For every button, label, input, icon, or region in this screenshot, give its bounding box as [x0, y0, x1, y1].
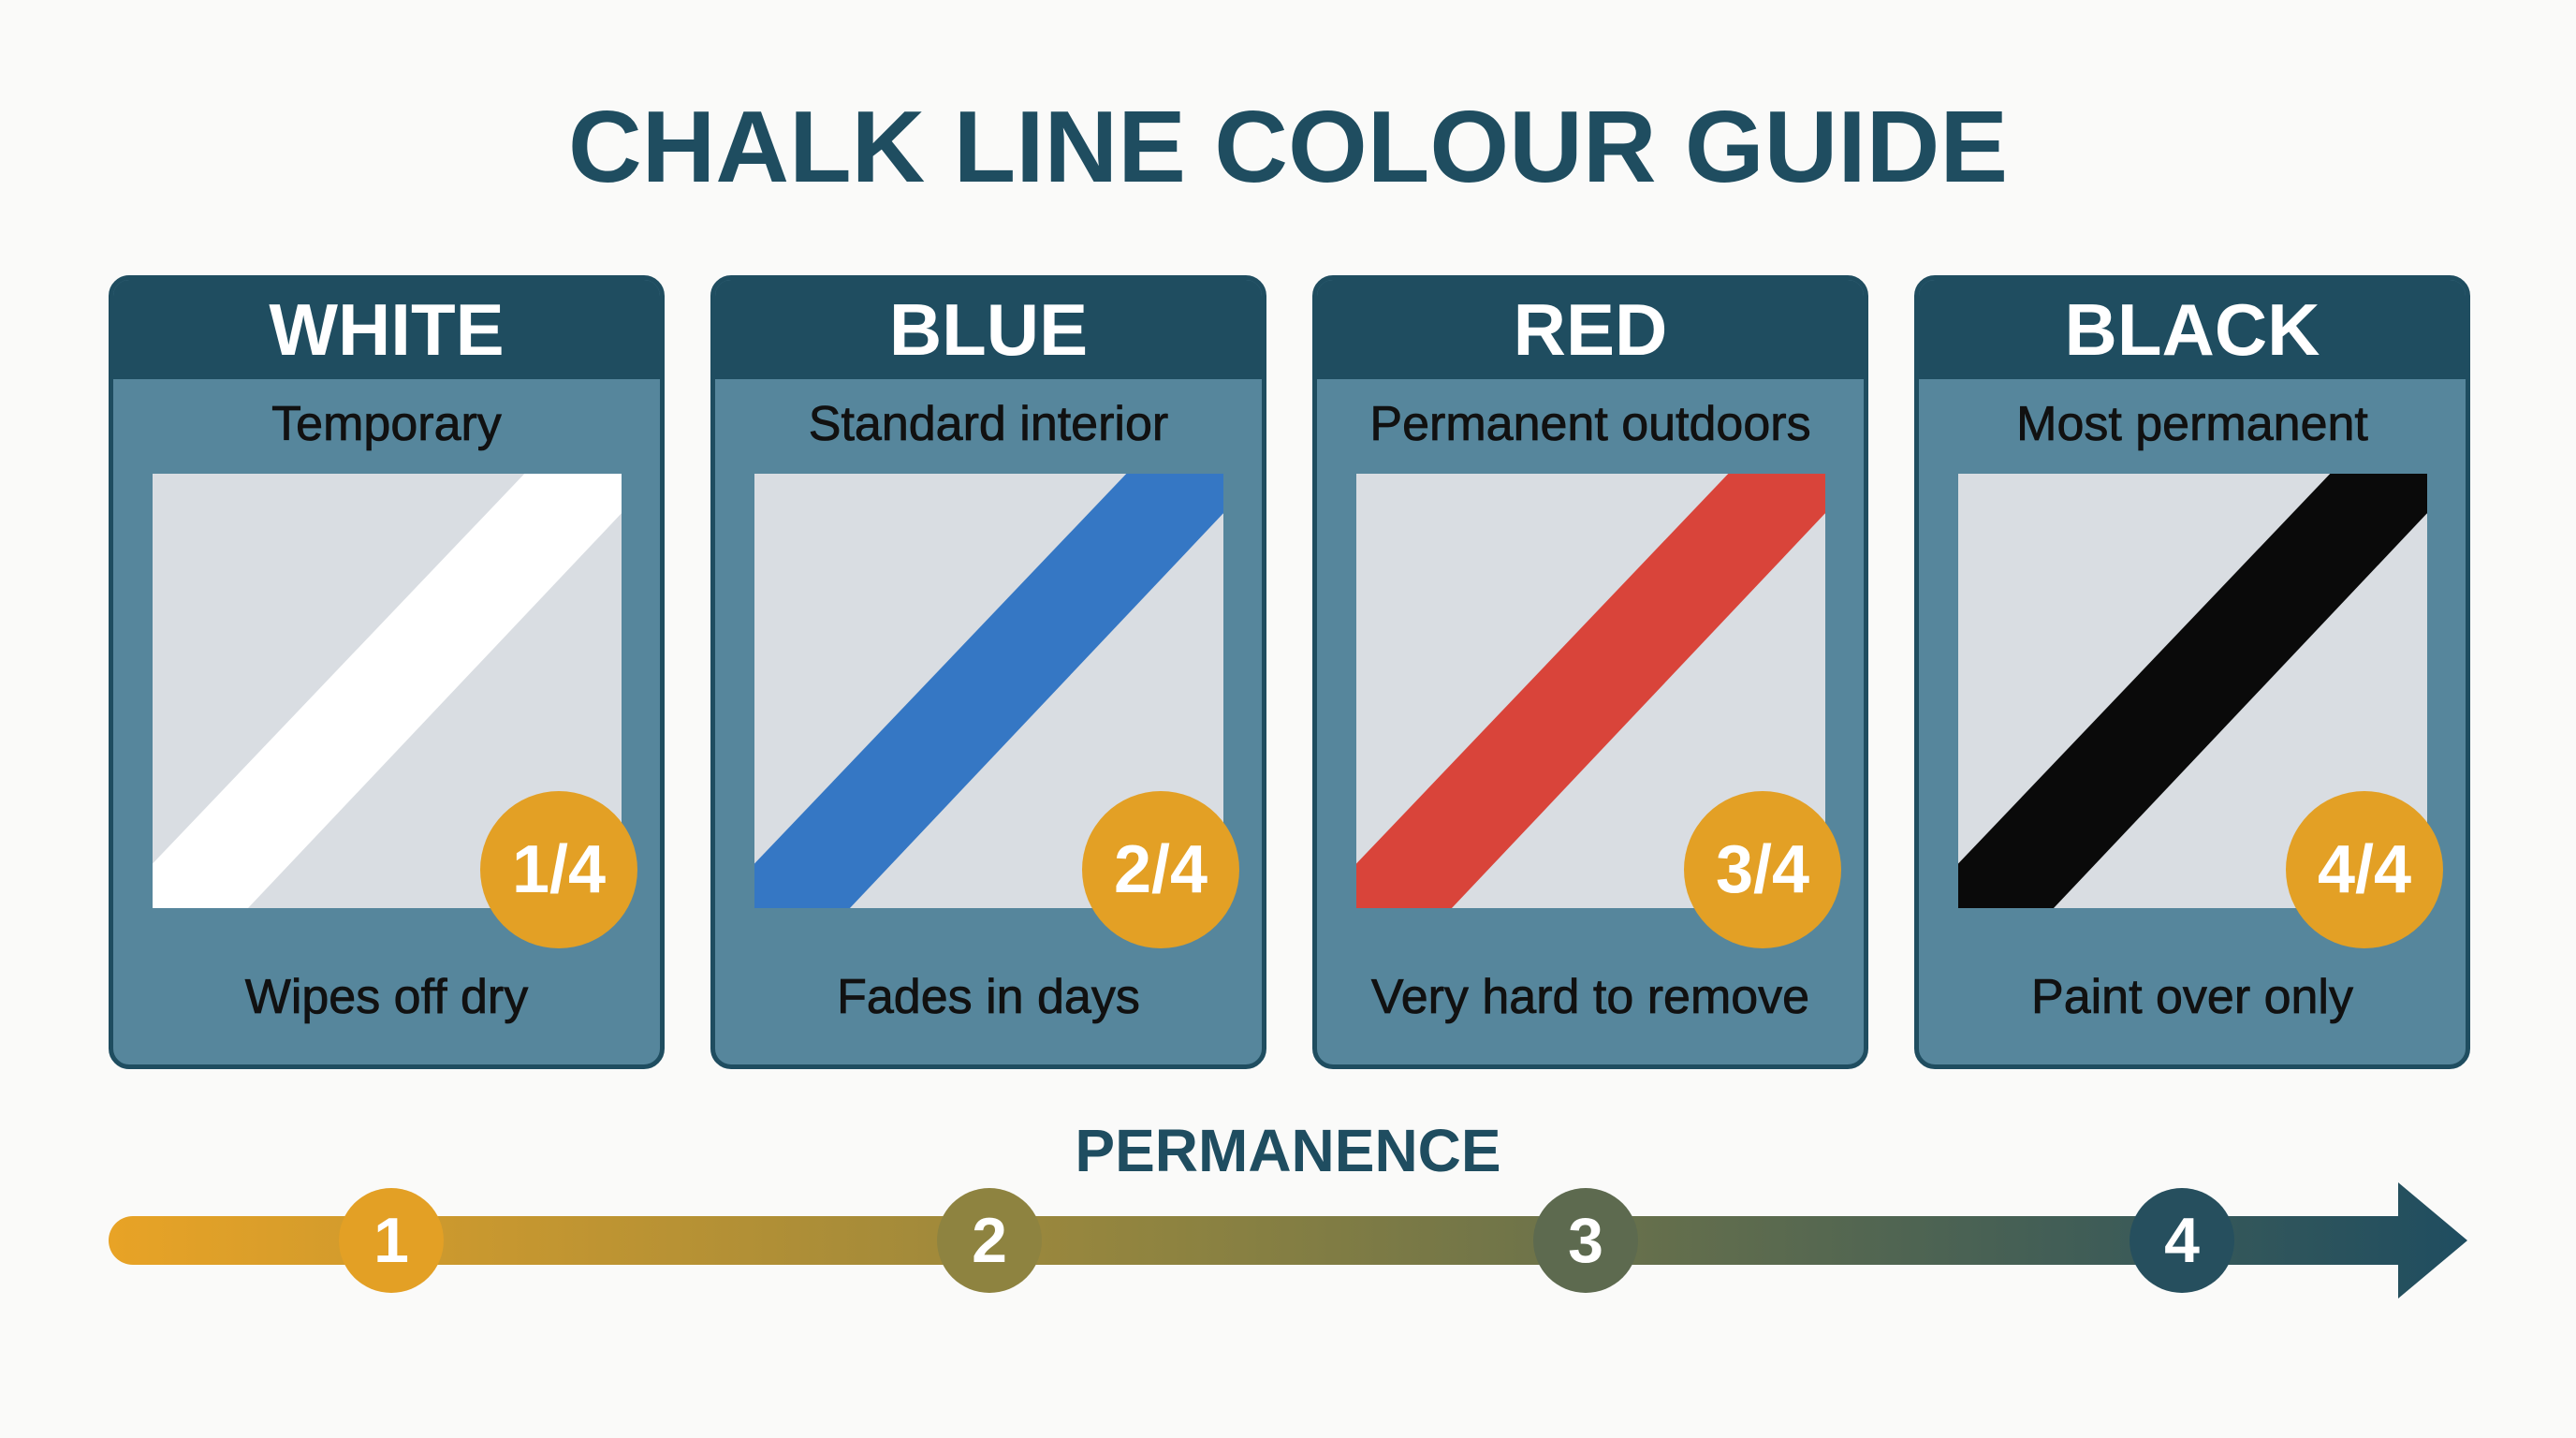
badge: 1/4: [480, 791, 637, 948]
panel: black: [1914, 275, 2470, 1069]
title: CHALK LINE COLOUR GUIDE: [568, 90, 2008, 204]
subtitle: Permanent outdoors: [1369, 397, 1811, 451]
header: white: WHITE: [269, 288, 505, 371]
swatch: white line: [153, 474, 622, 908]
badge: 3/4: 3/4: [1716, 832, 1809, 907]
marker 1: [339, 1188, 444, 1293]
subtitle: Most permanent: [2016, 397, 2368, 451]
caption: Wipes off dry: [245, 970, 528, 1024]
badge: 4/4: [2286, 791, 2443, 948]
panel: blue: [710, 275, 1266, 1069]
marker 1: 1: [373, 1205, 409, 1276]
badge: 1/4: 1/4: [512, 832, 606, 907]
caption: Fades in days: [837, 970, 1140, 1024]
swatch: red line: [1356, 474, 1825, 908]
header: blue: BLUE: [889, 288, 1088, 371]
marker 3: 3: [1568, 1205, 1603, 1276]
swatch: blue line: [754, 474, 1223, 908]
caption: Very hard to remove: [1371, 970, 1809, 1024]
badge: 2/4: [1082, 791, 1239, 948]
badge: 3/4: [1684, 791, 1841, 948]
header: red: [1317, 280, 1864, 379]
marker 4: [2130, 1188, 2234, 1293]
header: blue: [715, 280, 1262, 379]
subtitle: Standard interior: [809, 397, 1168, 451]
swatch: black line: [1958, 474, 2427, 908]
header: black: [1919, 280, 2466, 379]
panel: red: [1312, 275, 1868, 1069]
heading: permanence: PERMANENCE: [1075, 1117, 1501, 1184]
header: red: RED: [1514, 288, 1667, 371]
badge: 2/4: 2/4: [1114, 832, 1208, 907]
subtitle: temporary: Temporary: [271, 397, 502, 451]
marker 2: 2: [972, 1205, 1007, 1276]
header: white: [113, 280, 660, 379]
header: black: BLACK: [2065, 288, 2320, 371]
marker 4: 4: [2164, 1205, 2200, 1276]
marker 2: [937, 1188, 1042, 1293]
marker 3: [1533, 1188, 1638, 1293]
badge: 4/4: 4/4: [2318, 832, 2411, 907]
panel: white: [109, 275, 665, 1069]
caption: Paint over only: [2031, 970, 2353, 1024]
